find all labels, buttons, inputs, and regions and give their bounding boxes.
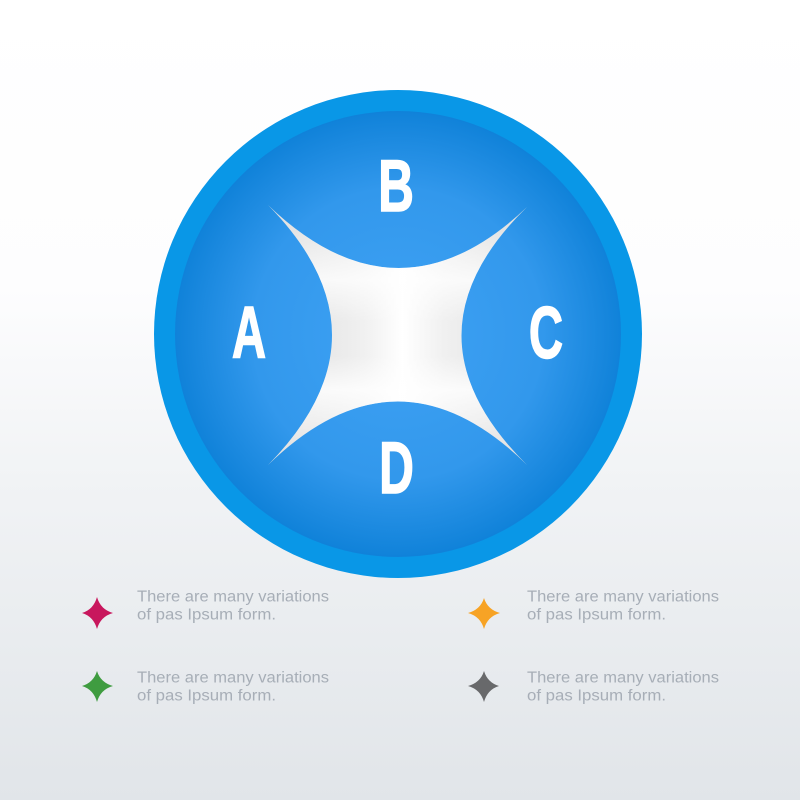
letter D: D [379,428,414,510]
legend text: There are many variations [137,588,329,606]
legend text: of pas Ipsum form. [137,688,276,704]
legend item: green [82,670,329,704]
legend text: There are many variations [527,588,719,606]
legend text: of pas Ipsum form. [527,606,666,624]
legend text: of pas Ipsum form. [137,606,276,624]
legend text: There are many variations [137,670,329,686]
icon: green star [82,671,113,702]
legend text: of pas Ipsum form. [527,688,666,704]
outer ring [154,90,642,578]
icon: gray star [468,671,499,702]
letter C: C [529,293,563,375]
letter B: B [378,146,414,227]
legend text: There are many variations [527,670,719,686]
icon: orange star [468,598,500,629]
inner disc [175,111,621,557]
legend item: crimson [82,588,329,629]
letter A: A [232,292,266,374]
icon: crimson star [82,597,113,629]
legend item: orange [468,588,719,629]
circular diagram [154,90,642,578]
central four-point star [268,205,527,465]
legend item: gray [468,670,719,704]
